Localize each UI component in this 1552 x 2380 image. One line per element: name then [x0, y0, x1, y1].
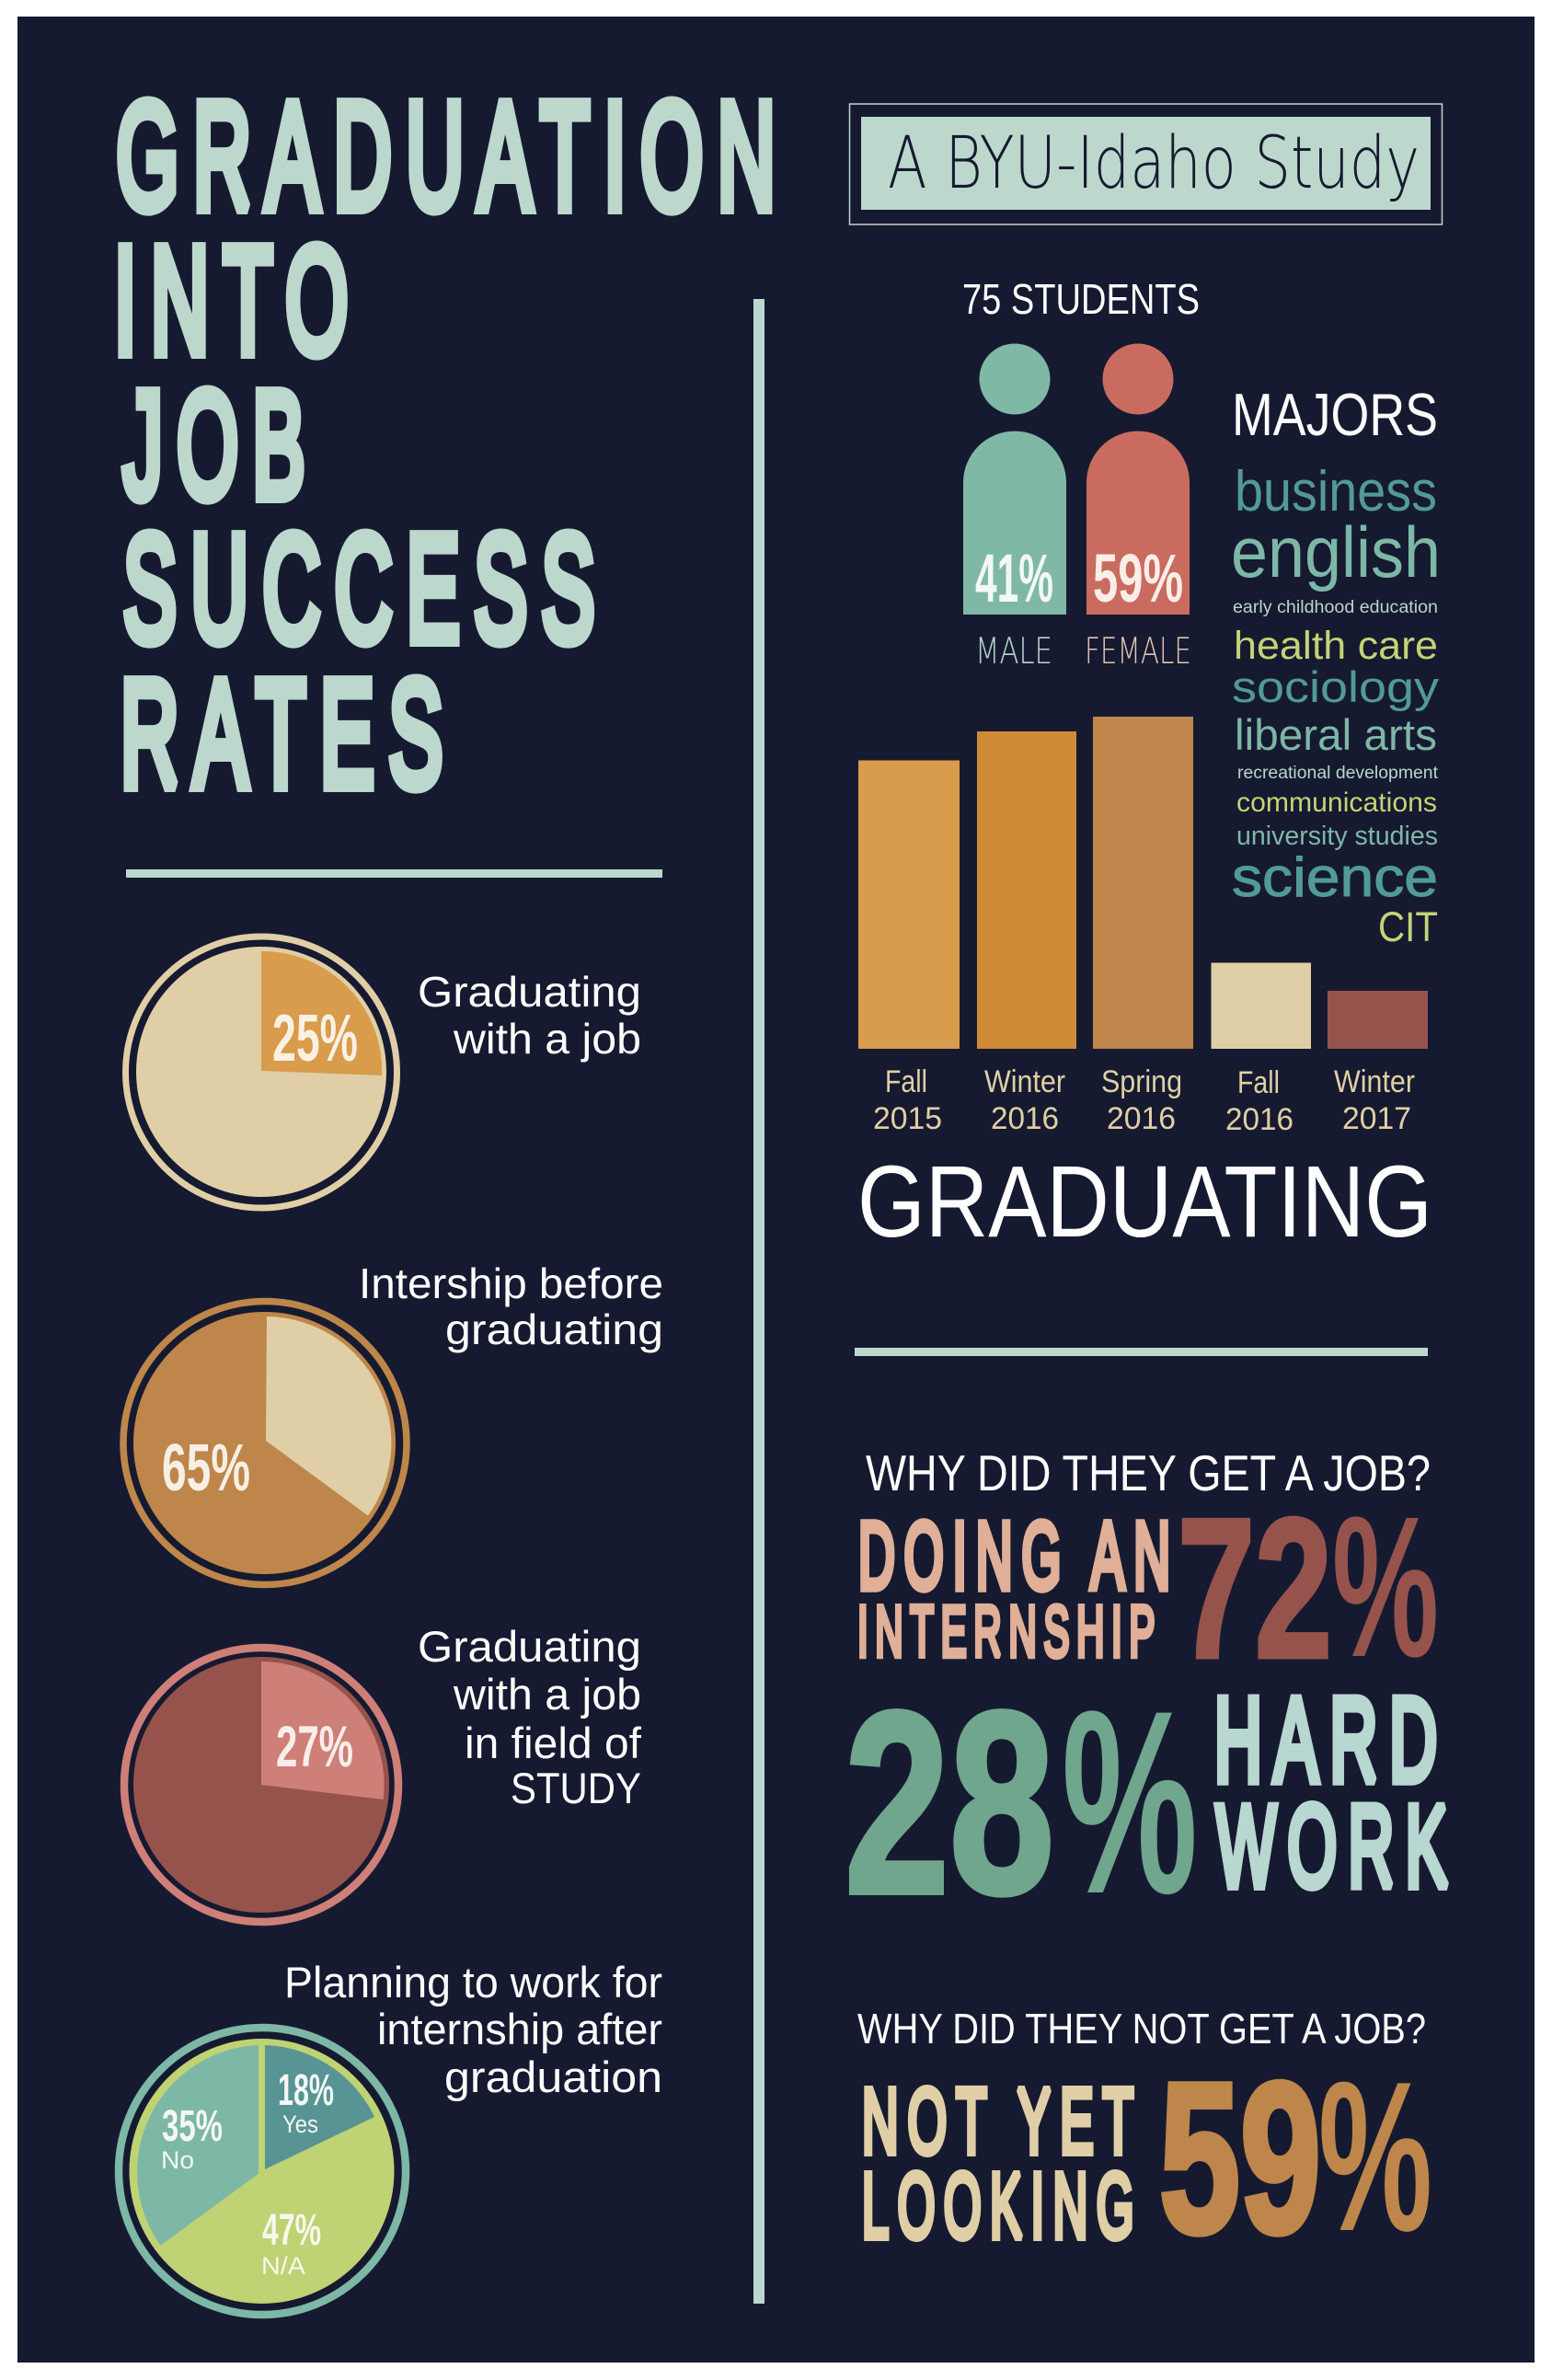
title	[114, 72, 789, 818]
label: job in field of study: STUDY	[511, 1764, 641, 1812]
vertical divider	[753, 299, 765, 2304]
stat label: doing an internship: DOING AN	[858, 1503, 1179, 1608]
bar: spring 2016	[1093, 717, 1193, 1049]
label: planning to work for internship: graduation	[444, 2052, 662, 2101]
axis labels: Spring	[1101, 1064, 1182, 1099]
title: GRADUATION	[116, 72, 789, 240]
axis labels: Fall	[885, 1064, 927, 1099]
bar: fall 2016	[1211, 962, 1311, 1049]
left horizontal divider	[126, 869, 662, 878]
word cloud: majors: recreational development	[1237, 764, 1439, 783]
word cloud: majors: science	[1232, 846, 1438, 908]
word cloud: majors: university studies	[1236, 822, 1438, 851]
stat label: doing an internship: INTERNSHIP	[857, 1591, 1162, 1672]
study badge: A BYU-Idaho Study	[888, 122, 1420, 205]
label: internship before graduating: Intership before	[359, 1259, 663, 1307]
pie: graduating with a job: 25%	[272, 1002, 358, 1075]
word cloud: majors: liberal arts	[1235, 710, 1437, 759]
pie: planning to work for internship	[119, 2028, 406, 2315]
pie: graduating with a job	[125, 937, 397, 1208]
heading: why did they get a job: WHY DID THEY GET A JOB?	[866, 1444, 1431, 1501]
label: planning to work for internship: internship after	[377, 2005, 662, 2053]
bar: fall 2015	[858, 760, 960, 1049]
stat label: not yet looking: NOT YET	[862, 2070, 1143, 2173]
axis labels: Winter	[1334, 1064, 1415, 1099]
axis labels: 2016	[991, 1101, 1059, 1136]
stat: 28 percent: 28	[845, 1658, 1054, 1948]
label: 35% no: No	[161, 2146, 194, 2174]
axis labels: Winter	[984, 1064, 1065, 1099]
heading: graduating: GRADUATING	[857, 1145, 1432, 1259]
axis labels: 2017	[1342, 1101, 1411, 1136]
pie: job in field of study	[124, 1648, 398, 1922]
label: 18% yes: 18%	[278, 2066, 334, 2115]
slice: yes	[265, 2045, 374, 2169]
label: planning to work for internship	[284, 1958, 662, 2101]
axis labels: 2016	[1225, 1102, 1293, 1137]
pie: internship before graduating: 65%	[162, 1431, 250, 1505]
title: JOB	[123, 361, 319, 529]
word cloud: majors: sociology	[1232, 662, 1440, 711]
label: 18% yes: Yes	[282, 2110, 318, 2138]
label: 35% no: 35%	[162, 2102, 223, 2151]
word cloud: majors: communications	[1236, 788, 1437, 818]
stat: 72 percent: %	[1332, 1476, 1439, 1699]
word cloud: majors: business	[1235, 460, 1437, 523]
stat: 28 percent: %	[1062, 1657, 1198, 1949]
label: graduating with a job: with a job	[453, 1015, 641, 1063]
stat label: hard work	[1214, 1674, 1459, 1911]
label: 18% yes	[278, 2066, 334, 2138]
label: female: FEMALE	[1085, 631, 1191, 673]
stat label: doing an internship	[857, 1503, 1179, 1672]
label: planning to work for internship: Planning to work for	[284, 1958, 662, 2006]
axis labels: 2016	[1107, 1101, 1176, 1136]
title: RATES	[121, 650, 457, 818]
study badge	[850, 104, 1443, 224]
stat: 72 percent: 72	[1178, 1477, 1332, 1699]
stat: 59 percent: 59	[1159, 2039, 1321, 2278]
label: job in field of study: with a job	[453, 1670, 641, 1719]
label: graduating with a job	[418, 968, 641, 1063]
stat label: not yet looking: LOOKING	[862, 2155, 1143, 2258]
icon: female figure	[1086, 344, 1190, 616]
icon: male figure: 41%	[975, 540, 1053, 616]
pie: job in field of study: 27%	[276, 1715, 353, 1779]
word cloud: majors	[1231, 460, 1441, 950]
label: graduating with a job: Graduating	[418, 968, 641, 1016]
icon: female figure: 59%	[1093, 540, 1183, 616]
word cloud: majors: CIT	[1378, 903, 1438, 950]
axis labels: Fall	[1237, 1065, 1280, 1100]
heading: why did they not get a job: WHY DID THEY NOT GET A JOB?	[857, 2005, 1426, 2052]
bar: winter 2017	[1328, 991, 1428, 1049]
label: job in field of study: in field of	[465, 1719, 642, 1767]
title: INTO	[114, 216, 362, 385]
label: 35% no	[161, 2102, 223, 2174]
pie: internship before graduating	[123, 1301, 407, 1584]
icon: male figure	[963, 344, 1066, 616]
word cloud: majors: english	[1231, 512, 1441, 592]
title: SUCCESS	[123, 504, 609, 673]
label: internship before graduating	[359, 1259, 663, 1353]
label: male: MALE	[975, 631, 1052, 673]
axis labels	[873, 1064, 1415, 1137]
axis labels: 2015	[873, 1101, 942, 1136]
stat label: not yet looking	[862, 2070, 1143, 2258]
word cloud: majors: health care	[1234, 624, 1438, 668]
label: 47% n/a: N/A	[261, 2252, 305, 2280]
word cloud: majors: early childhood education	[1233, 598, 1438, 617]
stat: 59 percent: %	[1318, 2038, 1432, 2276]
label: 47% n/a: 47%	[262, 2206, 321, 2255]
label: 47% n/a	[261, 2206, 321, 2280]
label: job in field of study	[418, 1622, 642, 1812]
label: job in field of study: Graduating	[418, 1622, 641, 1671]
slice: no	[137, 2045, 259, 2246]
heading: 75 students: 75 STUDENTS	[962, 275, 1200, 323]
right horizontal divider	[855, 1348, 1428, 1356]
heading: majors: MAJORS	[1232, 381, 1438, 448]
bar chart: graduating by semester	[858, 717, 1428, 1137]
label: internship before graduating: graduating	[445, 1305, 663, 1353]
bar: winter 2016	[977, 731, 1076, 1049]
